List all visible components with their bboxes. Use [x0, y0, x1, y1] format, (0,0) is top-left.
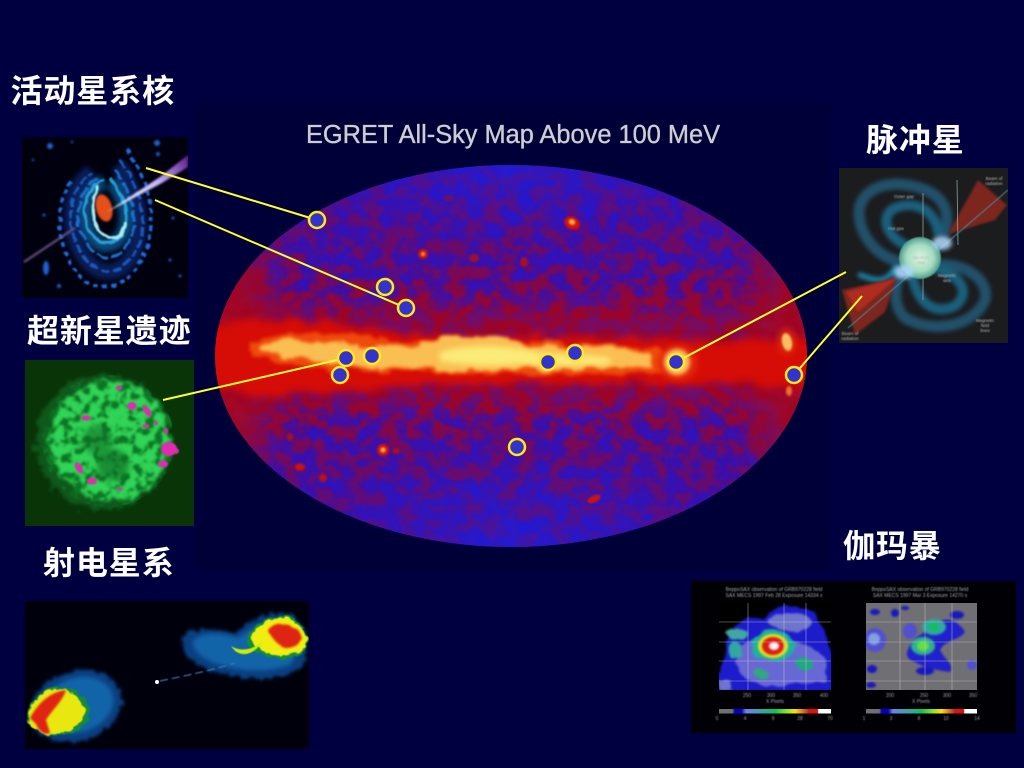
diagram captions: Beam of — [842, 331, 859, 336]
map backdrop — [195, 105, 830, 570]
neutron star — [899, 237, 941, 279]
left heatmap — [715, 603, 835, 692]
left plot titles: BeppoSAX observation of GRB970228 field — [726, 587, 823, 593]
right axis labels: 350 — [969, 693, 977, 699]
diagram captions: Beam of — [986, 176, 1003, 181]
magnetic field lobes — [859, 184, 986, 326]
right axis labels: 200 — [886, 693, 894, 699]
image: radio galaxy — [20, 601, 309, 754]
label: active galactic nuclei: 活动星系核 — [10, 73, 175, 109]
right plot titles — [872, 587, 969, 599]
band haze — [215, 305, 808, 407]
radiation cones — [948, 180, 1007, 234]
diagram captions: axis — [943, 278, 952, 283]
sky ellipse — [215, 165, 807, 547]
faint outer shell — [36, 374, 172, 510]
left lobe hot region — [27, 686, 90, 736]
diagram captions: field — [981, 323, 990, 328]
right axis labels: 300 — [943, 693, 951, 699]
right axis labels: 10 — [943, 716, 949, 722]
right axis labels: 14 — [974, 716, 980, 722]
diagram captions: Outer gap — [894, 194, 915, 199]
diagram captions: Magnetic — [976, 318, 995, 323]
left axis labels: 0 — [716, 716, 719, 722]
arm glow — [72, 165, 139, 272]
right axis labels: 3 — [890, 716, 893, 722]
left plot — [715, 587, 835, 722]
image: supernova remnant — [25, 360, 194, 526]
right plot titles: BeppoSAX observation of GRB970228 field — [872, 587, 969, 593]
diagram captions: radiation — [985, 181, 1003, 186]
right axis labels: 8 — [918, 716, 921, 722]
bright pulsar source — [658, 345, 698, 381]
panel: EGRET all-sky map — [215, 124, 807, 547]
right axis labels: X Pixels — [912, 699, 931, 705]
left axis labels — [716, 693, 833, 722]
diagram captions: radiation — [841, 336, 859, 341]
jets — [107, 155, 188, 212]
label: gamma-ray bursts: 伽玛暴 — [843, 528, 942, 564]
left axis labels: 250 — [743, 693, 751, 699]
left axis labels: 300 — [767, 693, 775, 699]
image: active galaxy — [22, 137, 188, 298]
galactic plane: red — [205, 320, 815, 395]
left plot titles — [725, 587, 823, 599]
right axis labels: 1 — [863, 716, 866, 722]
left axis labels: 9 — [772, 716, 775, 722]
left axis labels: 70 — [827, 716, 833, 722]
label: pulsars: 脉冲星 — [866, 122, 965, 158]
spin axis — [923, 180, 958, 300]
diagram captions: Hot gas — [888, 226, 905, 231]
right heatmap — [864, 603, 977, 690]
beam axis — [848, 190, 1008, 328]
point sources — [287, 195, 602, 505]
right axis labels — [863, 693, 980, 722]
spiral arms — [60, 150, 151, 287]
galactic plane: orange — [250, 333, 668, 375]
left axis labels: 28 — [797, 716, 803, 722]
map title: EGRET All-Sky Map Above 100 MeV — [306, 121, 720, 149]
magenta knots — [73, 386, 179, 490]
right axis labels: 250 — [920, 693, 928, 699]
diagram captions: star — [917, 260, 925, 265]
label: radio galaxies: 射电星系 — [43, 545, 175, 581]
stars — [32, 140, 181, 288]
source markers — [309, 212, 802, 455]
galactic plane: yellow — [262, 335, 652, 370]
diagram captions: Magnetic — [938, 273, 957, 278]
bright source near right edge — [777, 328, 797, 356]
left axis labels: 400 — [820, 693, 828, 699]
blue streak noise — [215, 165, 808, 547]
diagram captions: Neutron — [913, 255, 929, 260]
right plot titles: SAX MECS 1997 Mar 3 Exposure 14270 s — [873, 593, 968, 599]
nucleus — [155, 680, 159, 684]
image: gamma-ray burst maps — [691, 581, 1016, 733]
right lobe hot region — [246, 616, 307, 659]
label: supernova remnants: 超新星遗迹 — [27, 313, 192, 349]
callout lines — [146, 168, 862, 400]
jet — [160, 663, 235, 681]
image: pulsar diagram — [839, 168, 1008, 343]
right colour bar — [866, 709, 977, 714]
galactic centre — [440, 346, 610, 366]
bright shell — [50, 381, 170, 501]
left axis labels: 350 — [793, 693, 801, 699]
red mottling — [215, 165, 808, 547]
edge haze — [215, 237, 300, 476]
diagram captions — [841, 176, 1003, 341]
right plot — [863, 587, 980, 722]
left lobe halo — [26, 667, 126, 746]
galaxy core — [93, 192, 115, 224]
left plot titles: SAX MECS 1997 Feb 28 Exposure 14334 s — [725, 593, 823, 599]
right lobe halo — [180, 613, 307, 679]
diagram captions: lines — [980, 328, 990, 333]
left colour bar — [719, 709, 831, 714]
inner dark mottling — [40, 375, 180, 510]
left axis labels: 4 — [744, 716, 747, 722]
left axis labels: X Pixels — [766, 699, 785, 705]
magnetic poles — [932, 236, 952, 250]
polar blue — [382, 165, 645, 228]
